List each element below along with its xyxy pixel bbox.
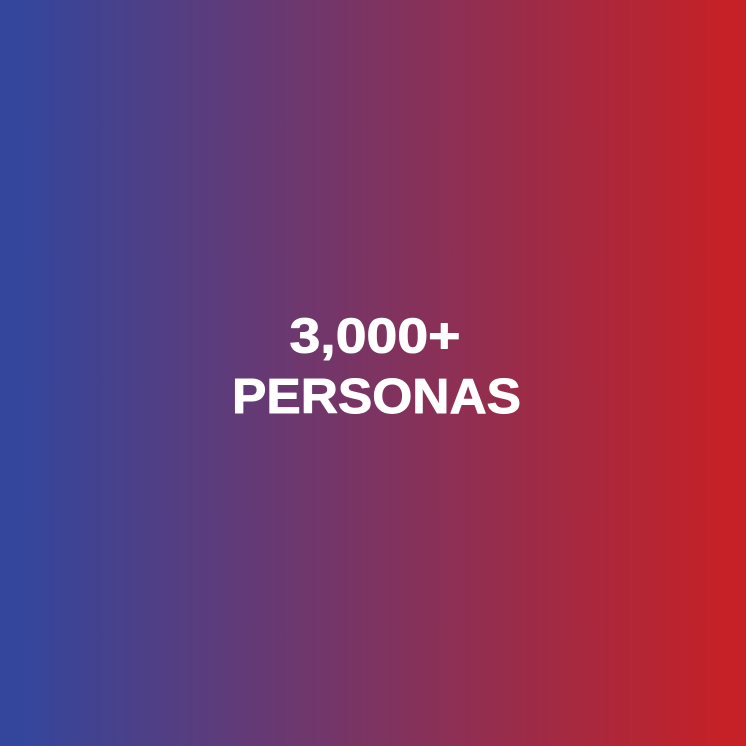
headline text: 3,000+ (290, 310, 460, 364)
headline text: PERSONAS (232, 370, 521, 424)
